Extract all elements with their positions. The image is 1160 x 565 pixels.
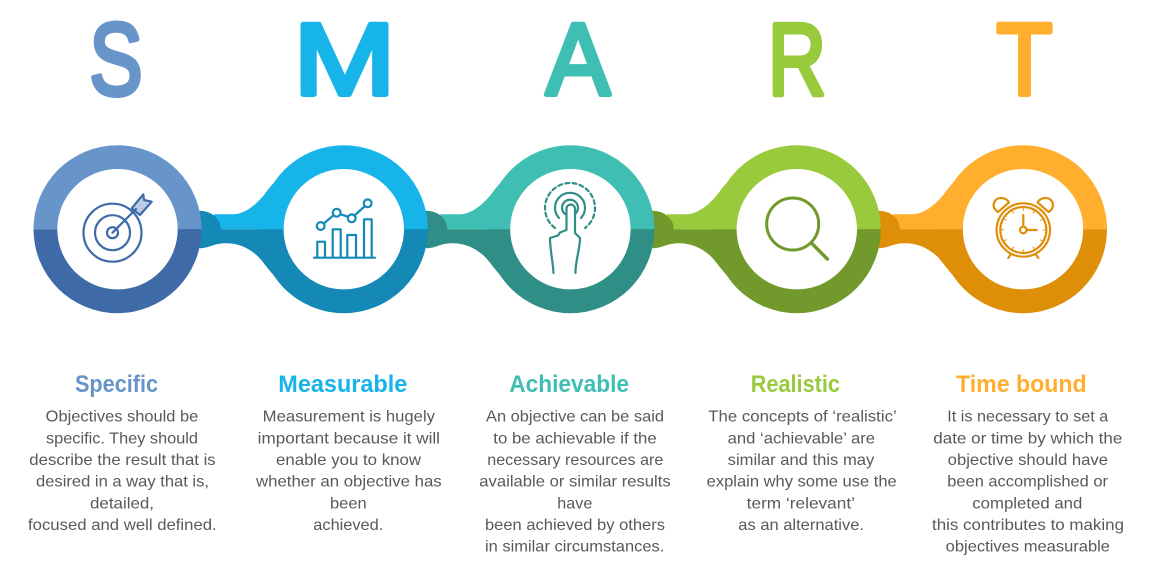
letter M: M xyxy=(294,2,396,116)
description: Measurable: Measurement is hugely xyxy=(263,409,435,426)
description: Specific: detailed, xyxy=(90,495,154,512)
description: Time bound: been accomplished or xyxy=(947,474,1109,491)
description: Realistic: similar and this may xyxy=(728,452,874,469)
description: Time bound xyxy=(932,409,1124,556)
description: Achievable: necessary resources are xyxy=(487,452,663,469)
description: Measurable xyxy=(255,409,442,534)
heading: Realistic: Realistic xyxy=(751,371,840,398)
icon: finger touching target xyxy=(545,183,595,273)
heading: Time bound: Time bound xyxy=(956,371,1087,398)
description: Realistic: as an alternative. xyxy=(738,517,864,534)
description: Achievable: in similar circumstances. xyxy=(485,539,664,556)
description: Specific: specific. They should xyxy=(46,430,198,447)
heading: Specific: Specific xyxy=(75,371,158,398)
description: Specific: desired in a way that is, xyxy=(36,474,209,491)
heading letters: SMART xyxy=(90,2,1052,116)
description: Achievable xyxy=(479,409,671,556)
text block: Time bound xyxy=(932,371,1124,556)
step 4 ring: Realistic xyxy=(632,145,881,313)
text block: Specific xyxy=(28,371,217,534)
description: Measurable: enable you to know xyxy=(276,452,421,469)
description: Achievable: available or similar results xyxy=(479,474,671,491)
letter R: R xyxy=(768,2,826,116)
step 2 ring: Measurable xyxy=(179,145,428,313)
text block: Achievable xyxy=(479,371,671,556)
step 5 ring: Time bound xyxy=(858,145,1107,313)
description: Time bound: this contributes to making xyxy=(932,517,1124,534)
description: Time bound: date or time by which the xyxy=(933,430,1122,447)
icon: alarm clock xyxy=(994,198,1053,258)
description: Time bound: It is necessary to set a xyxy=(947,409,1108,426)
icon: bar chart with trend line xyxy=(314,199,375,258)
icon: target with arrow xyxy=(84,194,152,262)
description: Realistic: term ‘relevant’ xyxy=(747,495,855,512)
description: Achievable: been achieved by others xyxy=(485,517,665,534)
description: Specific: focused and well defined. xyxy=(28,517,217,534)
description: Measurable: been xyxy=(330,495,367,512)
icon: magnifying glass xyxy=(767,198,827,259)
letter T: T xyxy=(996,2,1052,116)
description: Measurable: important because it will xyxy=(258,430,440,447)
description: Specific xyxy=(28,409,217,534)
text block: Measurable xyxy=(255,371,442,534)
description: Specific: Objectives should be xyxy=(46,409,198,426)
description: Achievable: have xyxy=(557,495,592,512)
description: Achievable: An objective can be said xyxy=(486,409,664,426)
description: Achievable: to be achievable if the xyxy=(493,430,657,447)
step 3 ring: Achievable xyxy=(405,145,654,313)
description: Realistic: The concepts of ‘realistic’ xyxy=(708,409,897,426)
description: Measurable: whether an objective has xyxy=(255,474,442,491)
letter A: A xyxy=(546,2,610,116)
description: Realistic: and ‘achievable’ are xyxy=(728,430,875,447)
description: Specific: describe the result that is xyxy=(29,452,216,469)
description: Measurable: achieved. xyxy=(313,517,383,534)
heading: Achievable: Achievable xyxy=(509,371,629,398)
text block: Realistic xyxy=(707,371,897,534)
description: Time bound: objective should have xyxy=(948,452,1108,469)
letter S: S xyxy=(90,2,142,116)
heading: Measurable: Measurable xyxy=(278,371,407,398)
description: Time bound: objectives measurable xyxy=(946,539,1110,556)
description: Realistic xyxy=(707,409,897,534)
step 1 ring: Specific xyxy=(34,145,202,313)
description: Time bound: completed and xyxy=(972,495,1082,512)
description: Realistic: explain why some use the xyxy=(707,474,897,491)
